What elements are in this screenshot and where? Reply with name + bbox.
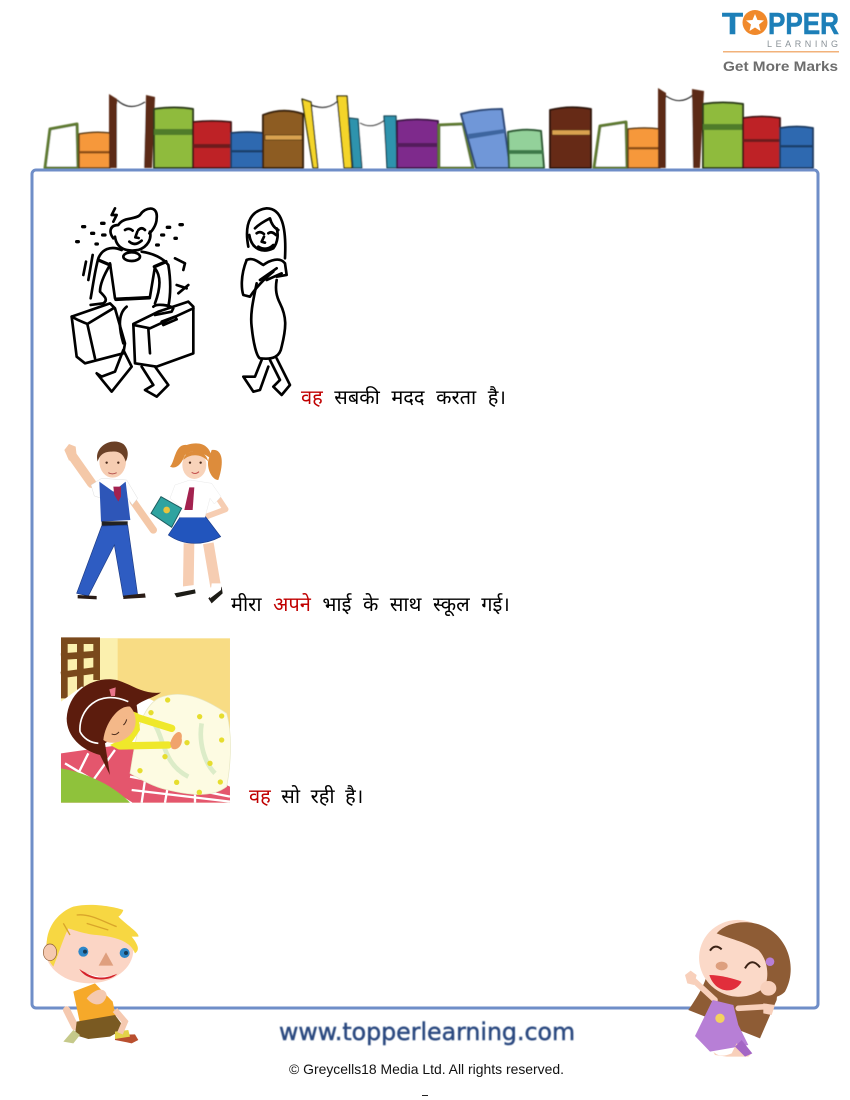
sketch: girl with folded hands [242, 208, 290, 395]
logo: Topper Learning: Get More Marks [723, 58, 838, 74]
bookshelf row of books [45, 88, 813, 168]
copyright line: © Greycells18 Media Ltd. All rights reserved. [289, 1061, 564, 1077]
sentence 3: वह सो रही है। [249, 783, 363, 808]
character: blond boy [43, 905, 138, 1043]
illustration: school boy and girl [64, 442, 226, 603]
worksheet frame [32, 170, 818, 1008]
sentence 2: मीरा अपने भाई के साथ स्कूल गई। [231, 592, 510, 617]
page number mark [422, 1095, 428, 1096]
logo: Topper Learning: LEARNING [767, 39, 838, 49]
illustration: girl sleeping in bed [61, 638, 230, 803]
logo: Topper Learning: PPER [768, 6, 839, 41]
logo: Topper Learning [722, 6, 839, 74]
website address: www.topperlearning.com [279, 1018, 575, 1046]
sketch: boy carrying suitcases [72, 208, 193, 397]
character: smiling girl [685, 911, 791, 1057]
logo: Topper Learning: T [722, 6, 743, 41]
sentence 1: वह सबकी मदद करता है। [301, 384, 506, 409]
